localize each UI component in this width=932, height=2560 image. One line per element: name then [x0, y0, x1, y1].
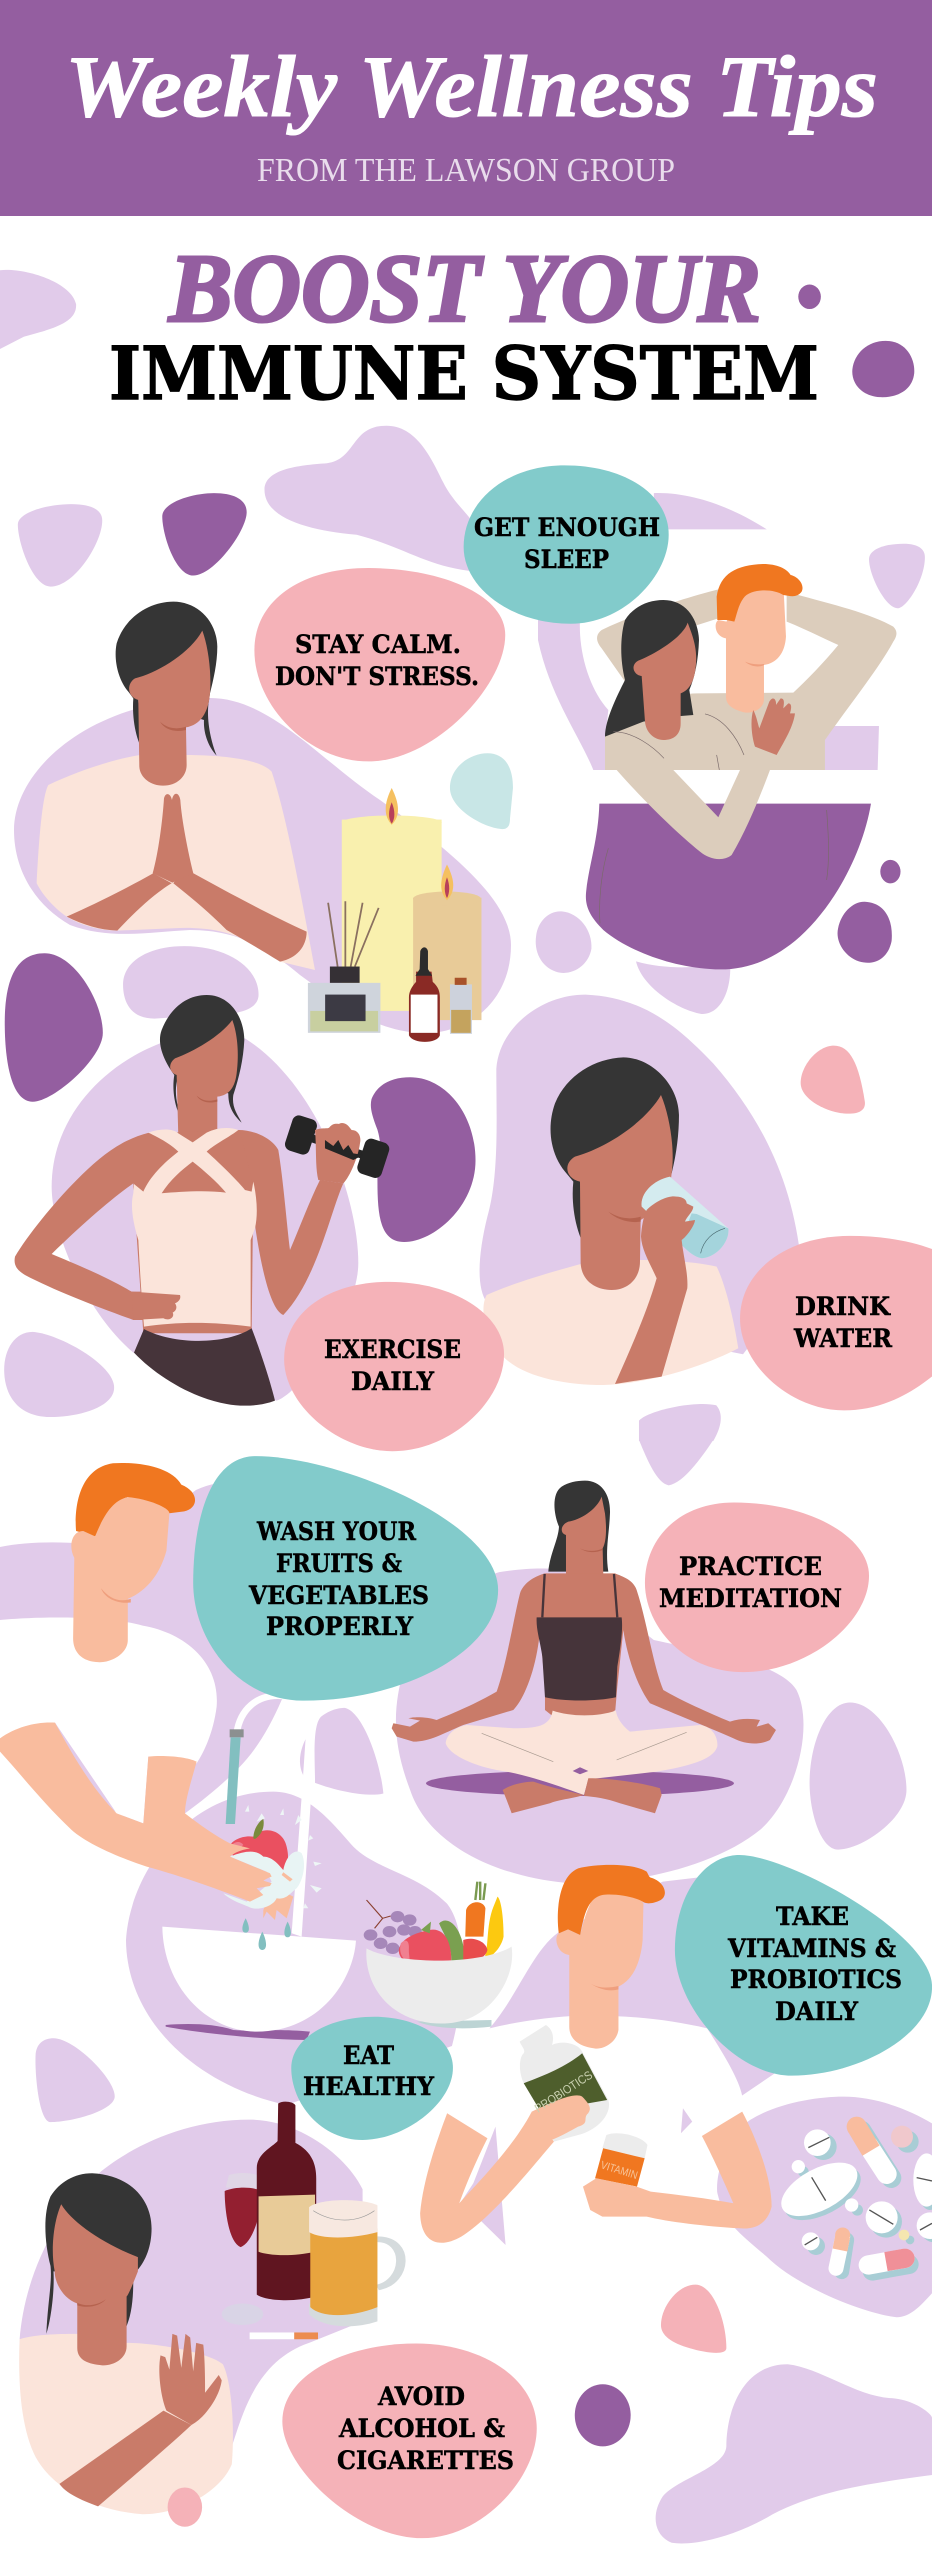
label: probiotics: PROBIOTICS [532, 2068, 595, 2116]
bubble: avoid alcohol [282, 2344, 537, 2538]
heading: immune system: IMMUNE SYSTEM [109, 331, 819, 417]
illustration: couple in bed [538, 564, 896, 969]
bubble: get enough sleep [464, 465, 669, 624]
illustration: woman drinking water [483, 1057, 738, 1385]
bubble: drink water: DRINK [795, 1292, 891, 1321]
dumbbell [283, 1114, 391, 1180]
bubble: avoid alcohol: ALCOHOL & [338, 2414, 505, 2443]
bubble: take vitamins: PROBIOTICS [730, 1965, 902, 1994]
illustration: candles and bottles [308, 788, 481, 1042]
bubble: stay calm: DON'T STRESS. [275, 662, 479, 691]
bubble: avoid alcohol: CIGARETTES [337, 2446, 514, 2475]
bubble: exercise daily [284, 1282, 504, 1451]
illustration: wine, beer and cigarette [222, 2102, 401, 2339]
bubble: eat healthy: EAT [343, 2041, 394, 2070]
bubble: avoid alcohol: AVOID [377, 2382, 465, 2411]
subtitle: FROM THE LAWSON GROUP [257, 152, 675, 189]
bubble: take vitamins: DAILY [775, 1997, 859, 2026]
bubble: stay calm [254, 568, 505, 761]
bubble: drink water: WATER [793, 1324, 892, 1353]
bubble: wash fruits: VEGETABLES [248, 1581, 429, 1610]
apple [229, 1819, 288, 1872]
illustration: man washing fruit [0, 1463, 356, 2040]
header banner [0, 0, 932, 216]
bubble: stay calm: STAY CALM. [295, 630, 461, 659]
bubble: practice meditation [645, 1502, 869, 1672]
illustration: woman meditating [392, 1481, 776, 1813]
title: Weekly Wellness Tips [65, 39, 878, 136]
illustration: pills [773, 2117, 932, 2272]
bubble: practice meditation: PRACTICE [679, 1552, 822, 1581]
bubble: exercise daily: EXERCISE [324, 1335, 461, 1364]
bubble: eat healthy: HEALTHY [303, 2072, 435, 2101]
bubble: eat healthy [291, 2017, 453, 2140]
bubble: take vitamins: TAKE [776, 1902, 849, 1931]
bubble: exercise daily: DAILY [351, 1367, 435, 1396]
faucet and water [226, 1696, 322, 1950]
illustration: woman exercising [15, 995, 391, 1406]
bubble: wash fruits: PROPERLY [266, 1612, 414, 1641]
bubble: get enough sleep: GET ENOUGH [474, 513, 660, 542]
bubble: wash fruits [193, 1456, 498, 1701]
bubble: get enough sleep: SLEEP [524, 545, 609, 574]
bubble: wash fruits: FRUITS & [276, 1549, 402, 1578]
bubble: drink water [740, 1236, 932, 1410]
bubble: take vitamins [675, 1855, 932, 2076]
bubble: wash fruits: WASH YOUR [256, 1517, 416, 1546]
bubble: practice meditation: MEDITATION [659, 1584, 842, 1613]
arms [0, 1723, 272, 1902]
basin [162, 1927, 356, 2032]
illustration: fruit bowl [364, 1882, 512, 2028]
label: vitamin: VITAMIN [599, 2159, 639, 2182]
illustration: man with vitamins [420, 1865, 824, 2247]
glass of water [642, 1177, 728, 1258]
illustration: woman praying [37, 602, 315, 970]
bubble: take vitamins: VITAMINS & [727, 1934, 896, 1963]
heading: boost your: BOOST YOUR [168, 235, 761, 342]
illustration: woman refusing alcohol [19, 2173, 233, 2527]
